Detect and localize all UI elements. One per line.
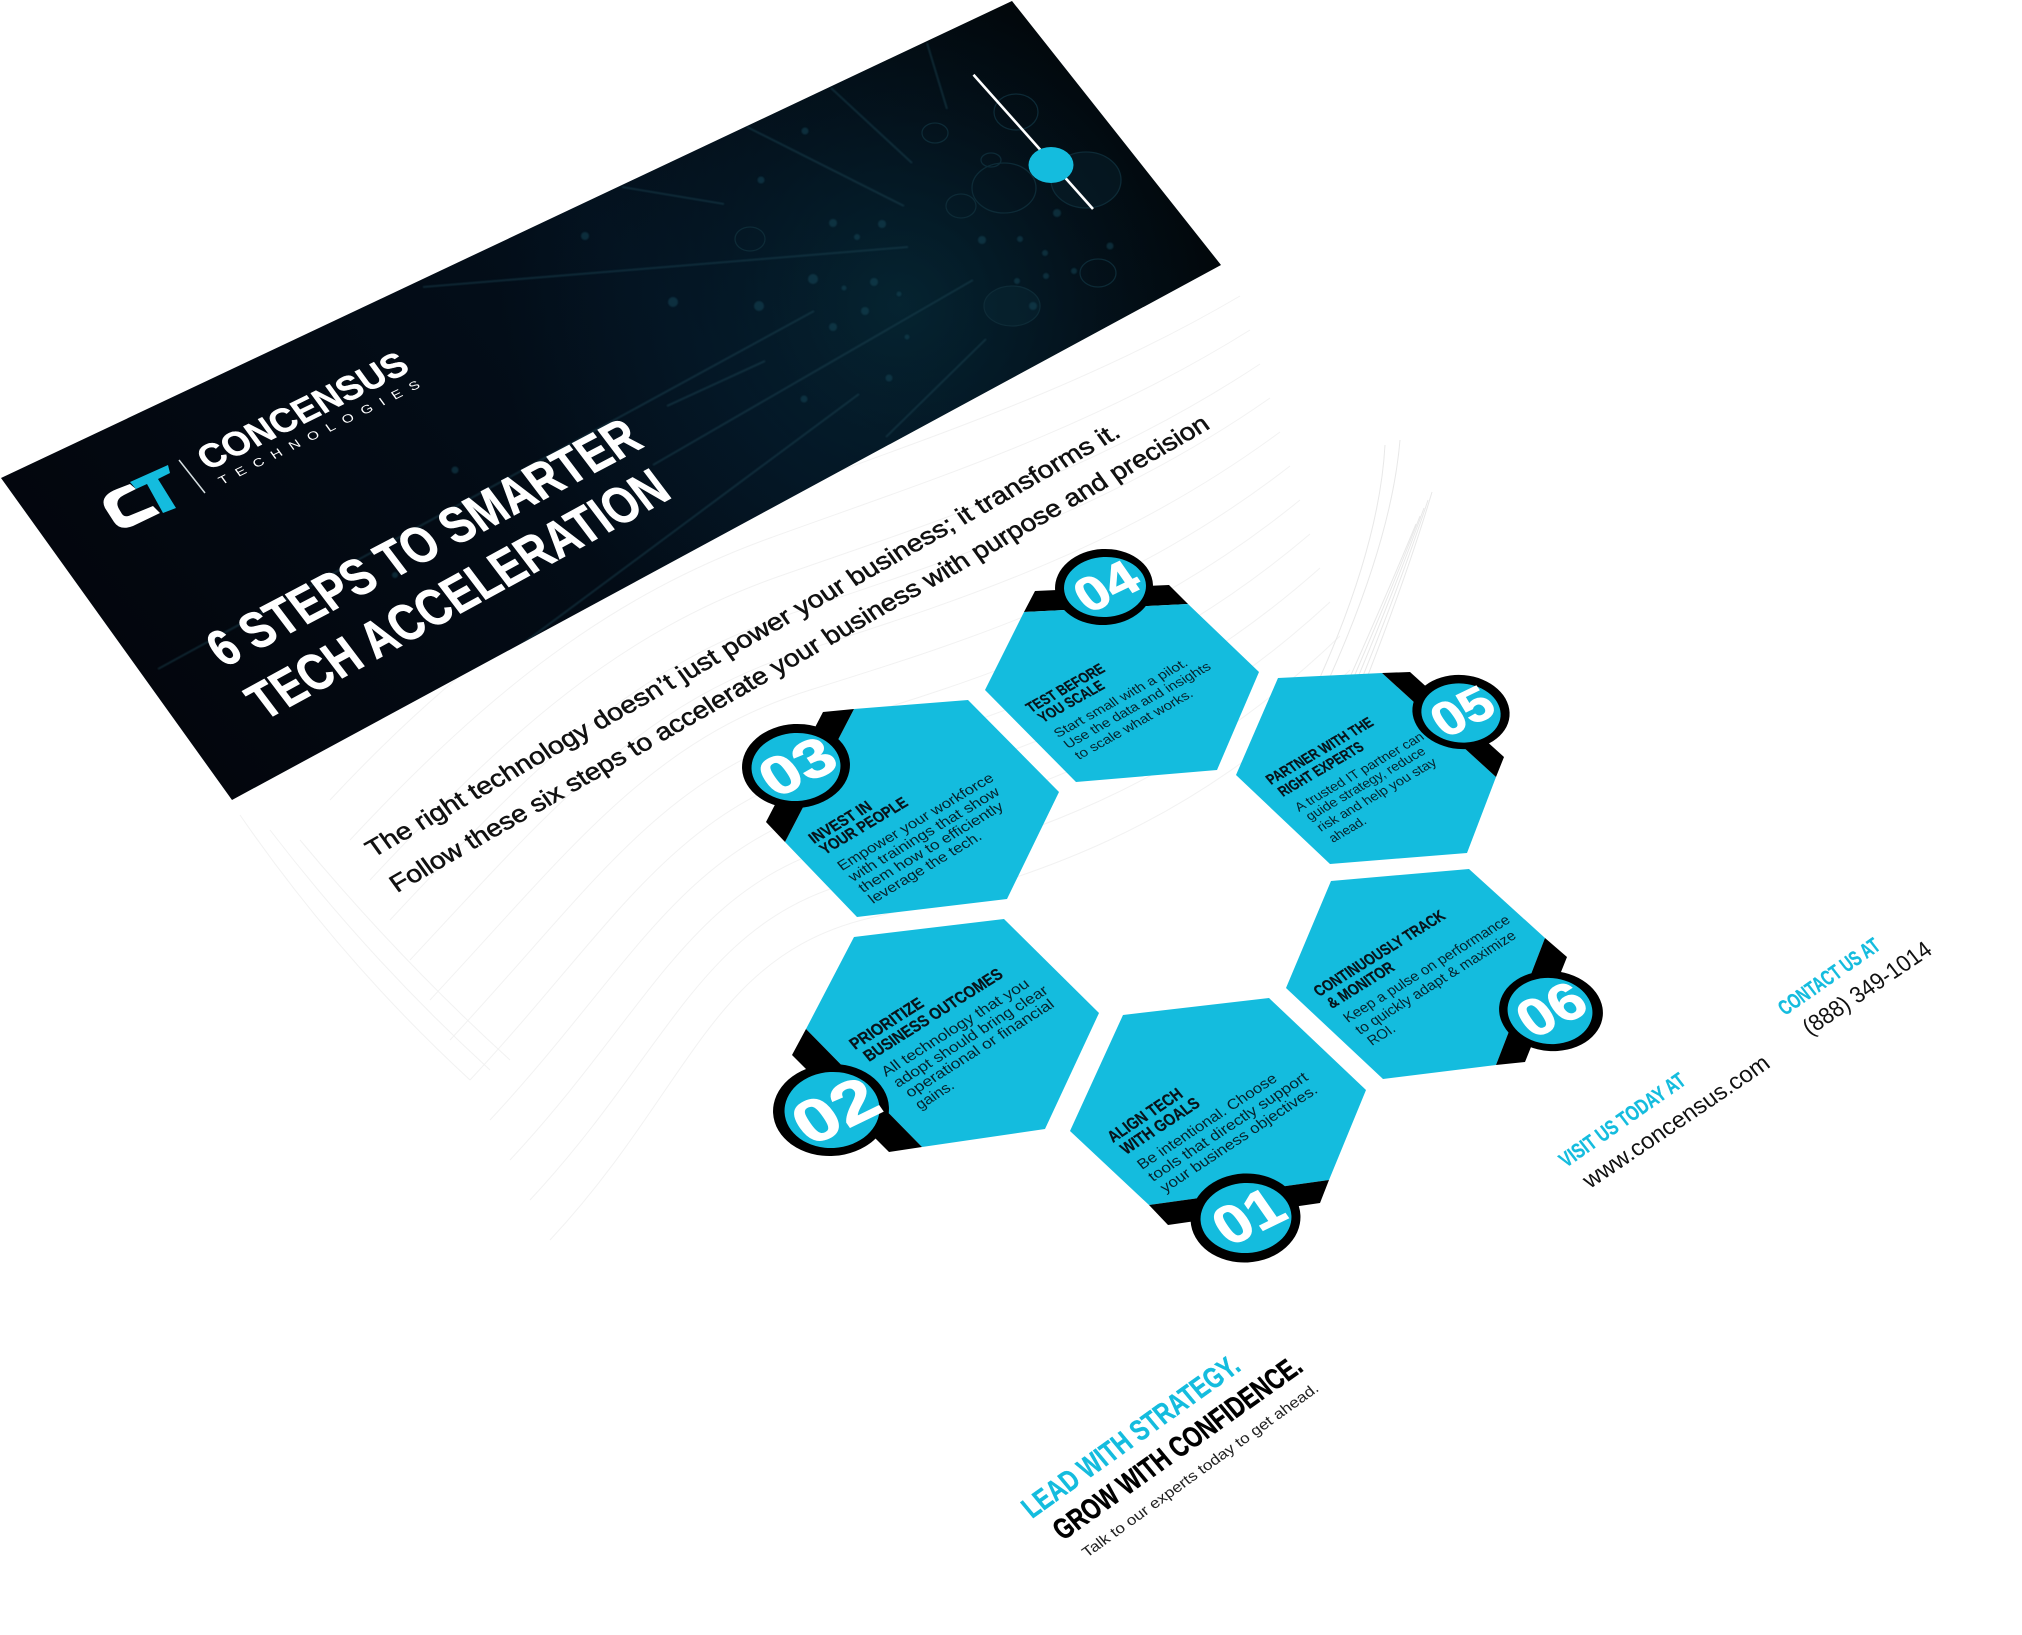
contact: website: VISIT US TODAY AT: [1555, 1069, 1691, 1172]
step 06 text: to quickly adapt & maximize: [1352, 928, 1519, 1038]
step 05 text: PARTNER WITH THE: [1262, 714, 1377, 788]
contact: phone: (888) 349-1014: [1797, 936, 1937, 1040]
panel: dark header banner: [1, 1, 1221, 800]
badge 01: 01: [1200, 1176, 1297, 1257]
step 04 text: YOU SCALE: [1034, 677, 1108, 726]
title: [195, 407, 681, 730]
badge 05: 05: [1419, 675, 1505, 747]
step 02 text: PRIORITIZE: [846, 995, 928, 1053]
step 01 text: [1104, 1069, 1321, 1196]
step 06 text: CONTINUOUSLY TRACK: [1310, 907, 1449, 1000]
step 05 text: [1262, 714, 1440, 846]
step 05 text: guide strategy, reduce: [1303, 744, 1429, 824]
badge 02: 02: [778, 1064, 893, 1158]
step 06 text: Keep a pulse on performance: [1340, 912, 1513, 1026]
step 02 text: gains.: [912, 1077, 958, 1113]
step 02 text: adopt should bring clear: [890, 982, 1052, 1091]
step 03 text: [805, 770, 1008, 907]
badge 03: 03: [746, 725, 849, 809]
step 03 text: YOUR PEOPLE: [816, 794, 911, 858]
step 01 text: WITH GOALS: [1117, 1095, 1204, 1158]
step 04 text: [1022, 656, 1214, 763]
background wave pattern: [240, 296, 1432, 1240]
panel: step 04: [985, 546, 1259, 782]
step 01 text: your business objectives.: [1157, 1082, 1321, 1196]
contact: website: [1555, 1050, 1775, 1194]
step 03 text: them how to efficiently: [855, 799, 1008, 896]
step 02 text: BUSINESS OUTCOMES: [860, 966, 1007, 1065]
closing call to action: [1015, 1349, 1322, 1561]
logo wordmark: CONCENSUS: [189, 345, 416, 478]
step 01 text: ALIGN TECH: [1104, 1085, 1187, 1146]
title: TECH ACCELERATION: [235, 458, 681, 730]
step 03 text: Empower your workforce: [834, 770, 997, 874]
step 05 text: ahead.: [1326, 814, 1370, 846]
contact: website: www.concensus.com: [1576, 1050, 1775, 1194]
step 02 text: All technology that you: [878, 975, 1033, 1080]
contact: phone: CONTACT US AT: [1774, 934, 1885, 1020]
closing call to action: GROW WITH CONFIDENCE.: [1046, 1350, 1309, 1546]
icon: CT mark: [104, 465, 176, 528]
step 06 text: ROI.: [1364, 1021, 1399, 1049]
step 03 text: INVEST IN: [805, 798, 876, 847]
badge 04: 04: [1062, 550, 1150, 623]
intro text: The right technology doesn’t just power your business; it transforms it.: [360, 418, 1125, 862]
step 03 text: with trainings that show: [844, 784, 1003, 885]
step 04 text: to scale what works.: [1072, 687, 1196, 763]
panel: step 01: [1070, 998, 1366, 1265]
step 04 text: Start small with a pilot.: [1051, 656, 1191, 741]
logo: [104, 345, 423, 528]
step 06 text: & MONITOR: [1323, 959, 1398, 1012]
step 04 text: TEST BEFORE: [1022, 660, 1108, 716]
title: 6 STEPS TO SMARTER: [195, 407, 652, 677]
decorative line with dot: [974, 75, 1093, 209]
step 02 text: [846, 966, 1058, 1113]
step 05 text: risk and help you stay: [1314, 755, 1440, 835]
step 04 text: Use the data and insights: [1061, 660, 1214, 752]
logo subtitle: TECHNOLOGIES: [216, 378, 423, 487]
step 01 text: Be intentional. Choose: [1134, 1070, 1280, 1173]
step 05 text: A trusted IT partner can: [1292, 730, 1427, 815]
intro text: Follow these six steps to accelerate your business with purpose and precision: [384, 410, 1214, 897]
closing call to action: LEAD WITH STRATEGY.: [1015, 1349, 1247, 1524]
closing call to action: Talk to our experts today to get ahead.: [1079, 1380, 1322, 1561]
step 05 text: RIGHT EXPERTS: [1274, 738, 1367, 800]
step 02 text: operational or financial: [902, 996, 1058, 1101]
contact: phone: [1774, 934, 1937, 1040]
panel: step 06: [1286, 869, 1606, 1079]
panel: step 03: [740, 700, 1059, 917]
step 03 text: leverage the tech.: [865, 829, 985, 907]
badge 06: 06: [1504, 970, 1599, 1049]
panel: step 05: [1236, 671, 1513, 864]
panel: step 02: [771, 919, 1099, 1159]
step 01 text: tools that directly support: [1145, 1069, 1312, 1185]
step 06 text: [1310, 907, 1519, 1049]
